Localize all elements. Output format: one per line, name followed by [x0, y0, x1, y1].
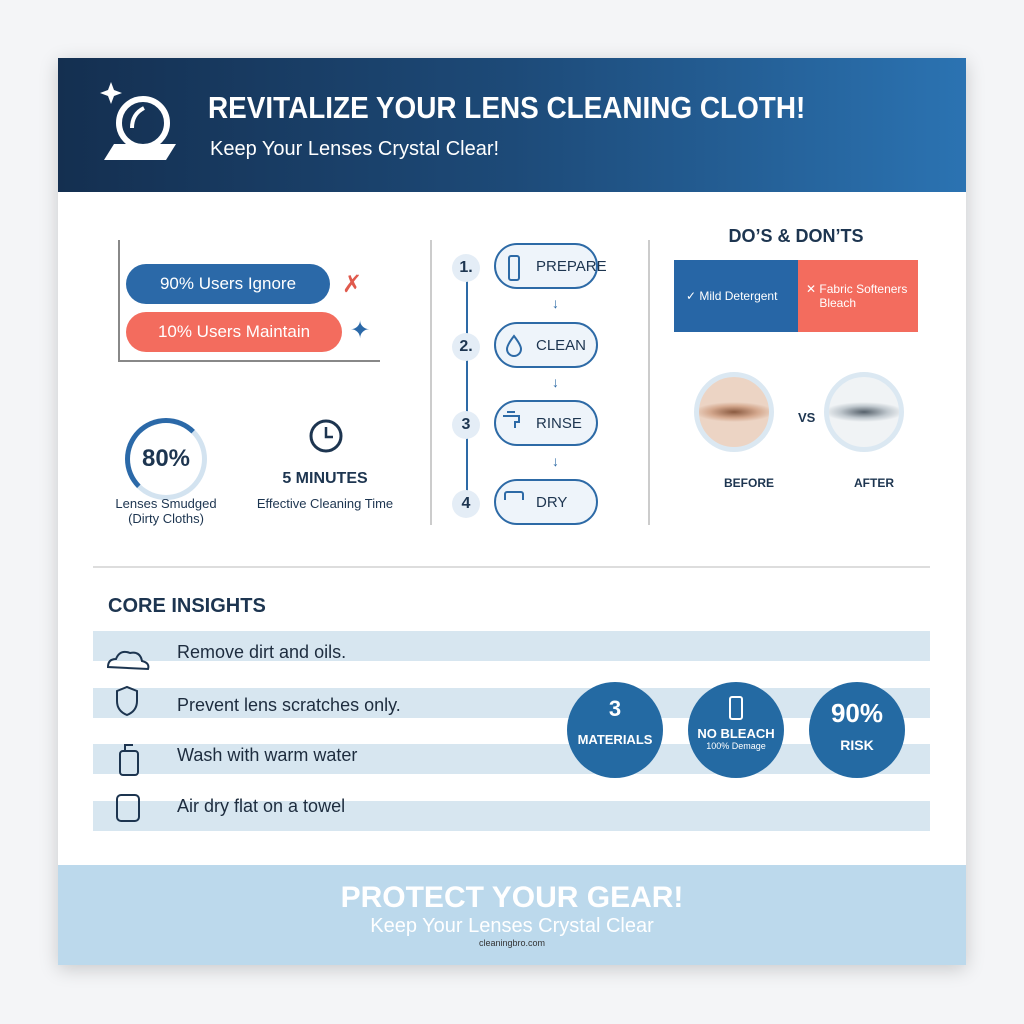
card	[58, 58, 966, 965]
insights list: Air dry flat on a towel	[177, 796, 345, 816]
dos and donts	[674, 226, 918, 332]
text: RISK	[840, 737, 874, 753]
bar chart: 10% Users Maintain	[158, 322, 310, 341]
before / after: VS	[798, 410, 815, 425]
text: 90%	[831, 698, 883, 728]
insights list	[93, 631, 930, 831]
text: ↓	[552, 295, 559, 311]
stat: 80%: 80%	[142, 445, 190, 472]
text: 2.	[459, 338, 473, 355]
dos and donts: ✓ Mild Detergent	[686, 289, 777, 303]
dos and donts: ✕ Fabric Softeners	[806, 282, 907, 296]
stat: 80%: Lenses Smudged	[115, 496, 217, 511]
text: DRY	[536, 494, 567, 510]
stat: 80%: (Dirty Cloths)	[128, 511, 204, 526]
title: REVITALIZE YOUR LENS CLEANING CLOTH!	[208, 90, 805, 125]
insights list: Remove dirt and oils.	[177, 642, 346, 662]
dos and donts: DO’S & DON’TS	[728, 226, 864, 246]
header	[58, 58, 966, 192]
subtitle: Keep Your Lenses Crystal Clear!	[210, 138, 499, 160]
dos and donts: Bleach	[819, 296, 856, 310]
bar chart: 90% Users Ignore	[160, 274, 296, 293]
stat circles: MATERIALS	[578, 732, 652, 747]
text: ↓	[552, 453, 559, 469]
steps	[466, 282, 468, 490]
footer: PROTECT YOUR GEAR!	[341, 881, 683, 914]
before / after	[694, 372, 904, 490]
text: RINSE	[536, 414, 582, 432]
text: ↓	[552, 374, 559, 390]
bar chart	[118, 240, 380, 362]
text: 4	[462, 495, 470, 512]
stat circles: 3	[609, 696, 621, 721]
stat: 5 minutes: 5 MINUTES	[282, 470, 368, 487]
bar chart: ✗	[342, 271, 362, 298]
text: NO BLEACH	[697, 726, 775, 741]
stat circles	[567, 682, 663, 778]
step icons	[503, 255, 524, 500]
text: PREPARE	[536, 258, 607, 274]
before / after: BEFORE	[724, 476, 774, 490]
text: 3	[462, 416, 470, 433]
footer	[58, 865, 966, 965]
stat: 5 minutes	[257, 420, 393, 511]
insights list: Prevent lens scratches only.	[177, 695, 401, 715]
insights list: Wash with warm water	[177, 745, 357, 765]
footer: cleaningbro.com	[479, 938, 545, 948]
footer: Keep Your Lenses Crystal Clear	[370, 915, 654, 937]
text: CLEAN	[536, 336, 586, 354]
stat: 80%	[115, 418, 217, 526]
text: 1.	[459, 259, 473, 276]
icon: lens	[100, 82, 176, 160]
bar chart: ✦	[350, 317, 370, 344]
core insights heading: CORE INSIGHTS	[108, 595, 266, 617]
text: 100% Demage	[706, 741, 766, 751]
stat: 5 minutes: Effective Cleaning Time	[257, 496, 393, 511]
before / after: AFTER	[854, 476, 894, 490]
